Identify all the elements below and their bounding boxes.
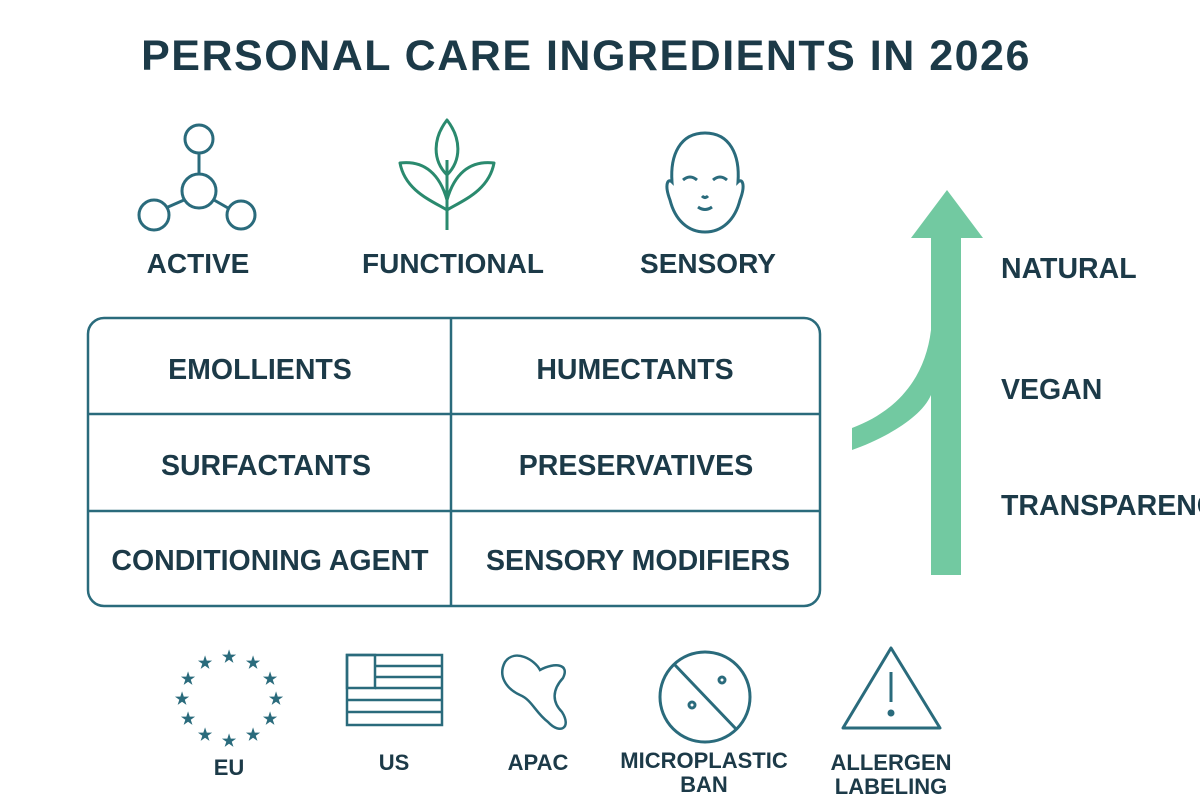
title: PERSONAL CARE INGREDIENTS IN 2026 — [141, 32, 1031, 80]
icon: US flag — [347, 655, 442, 725]
icon: EU stars — [175, 649, 284, 750]
label: active: ACTIVE — [147, 248, 249, 279]
table: ingredient classes: PRESERVATIVES — [519, 450, 753, 482]
icon: molecule — [139, 125, 255, 230]
icon: allergen warning — [843, 648, 940, 728]
bottom labels: APAC — [508, 750, 568, 775]
icon: EU stars: ★ — [181, 671, 196, 688]
bottom labels: LABELING — [835, 774, 947, 799]
icon: plant — [400, 120, 494, 230]
arrow: trends — [852, 190, 983, 575]
table: ingredient classes: EMOLLIENTS — [168, 354, 352, 386]
icon: EU stars: ★ — [198, 655, 213, 672]
trend labels: NATURAL — [1001, 253, 1137, 285]
bottom labels: MICROPLASTIC — [620, 748, 788, 773]
bottom labels: ALLERGEN — [830, 750, 952, 775]
table: ingredient classes — [88, 318, 820, 606]
label: functional: FUNCTIONAL — [362, 248, 544, 279]
icon: EU stars: ★ — [246, 727, 261, 744]
icon: microplastic ban — [660, 652, 750, 742]
icon: EU stars: ★ — [222, 733, 237, 750]
bottom labels — [214, 748, 952, 799]
icon: EU stars: ★ — [181, 711, 196, 728]
icon: APAC map — [502, 656, 566, 729]
table: ingredient classes: HUMECTANTS — [536, 354, 734, 386]
icon: EU stars: ★ — [246, 655, 261, 672]
icon: EU stars: ★ — [222, 649, 237, 666]
icon: EU stars: ★ — [198, 727, 213, 744]
icon: EU stars: ★ — [269, 691, 284, 708]
bottom labels: EU — [214, 755, 244, 780]
table: ingredient classes: SURFACTANTS — [161, 450, 371, 482]
table: ingredient classes: SENSORY MODIFIERS — [486, 545, 790, 577]
icon: EU stars: ★ — [175, 691, 190, 708]
label: sensory: SENSORY — [640, 248, 776, 279]
bottom labels: US — [379, 750, 409, 775]
trend labels: VEGAN — [1001, 374, 1102, 406]
icon: face — [667, 133, 743, 232]
trend labels — [1001, 253, 1200, 522]
icon: EU stars: ★ — [263, 671, 278, 688]
bottom labels: BAN — [680, 772, 728, 797]
icon: EU stars: ★ — [263, 711, 278, 728]
table: ingredient classes: CONDITIONING AGENT — [111, 545, 429, 577]
